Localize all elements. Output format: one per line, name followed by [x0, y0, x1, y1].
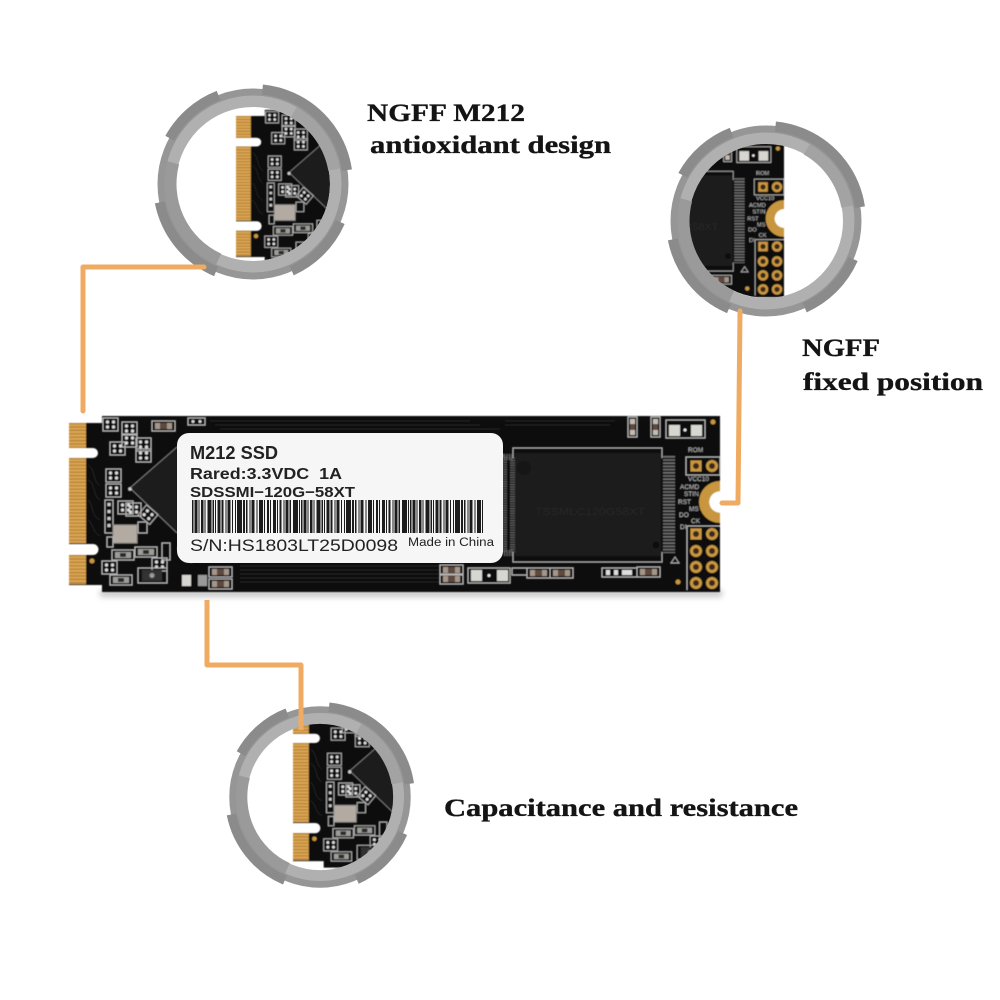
heading: NGFF M212 antioxidant design [367, 100, 611, 159]
SSD circuit board [69, 416, 722, 597]
connector line: bottom ring to SSD lower edge [207, 600, 301, 730]
heading: Capacitance and resistance: Capacitance and resistance [444, 795, 798, 822]
product label sticker [177, 433, 503, 563]
heading: NGFF fixed position [802, 335, 983, 396]
heading: NGFF fixed position: NGFF [802, 335, 880, 362]
connector line: right ring to SSD mounting notch [722, 311, 740, 503]
origin text: Made in China [408, 537, 495, 549]
label text: part number: SDSSMI−120G−58XT [190, 484, 355, 501]
callout ring: connector detail [155, 84, 352, 280]
heading: NGFF M212 antioxidant design: antioxidant design [370, 132, 611, 159]
barcode [192, 500, 485, 533]
callout ring: capacitor and resistor detail [226, 702, 414, 888]
label text: rating: Rared:3.3VDC 1A [190, 466, 342, 483]
label text: model: M212 SSD [190, 443, 278, 463]
heading: NGFF M212 antioxidant design: NGFF M212 [367, 100, 525, 127]
callout ring: mounting notch detail [668, 122, 865, 316]
serial number: S/N:HS1803LT25D0098 [190, 536, 398, 555]
connector line: top left ring to SSD connector [83, 267, 204, 411]
heading: NGFF fixed position: fixed position [803, 369, 983, 396]
